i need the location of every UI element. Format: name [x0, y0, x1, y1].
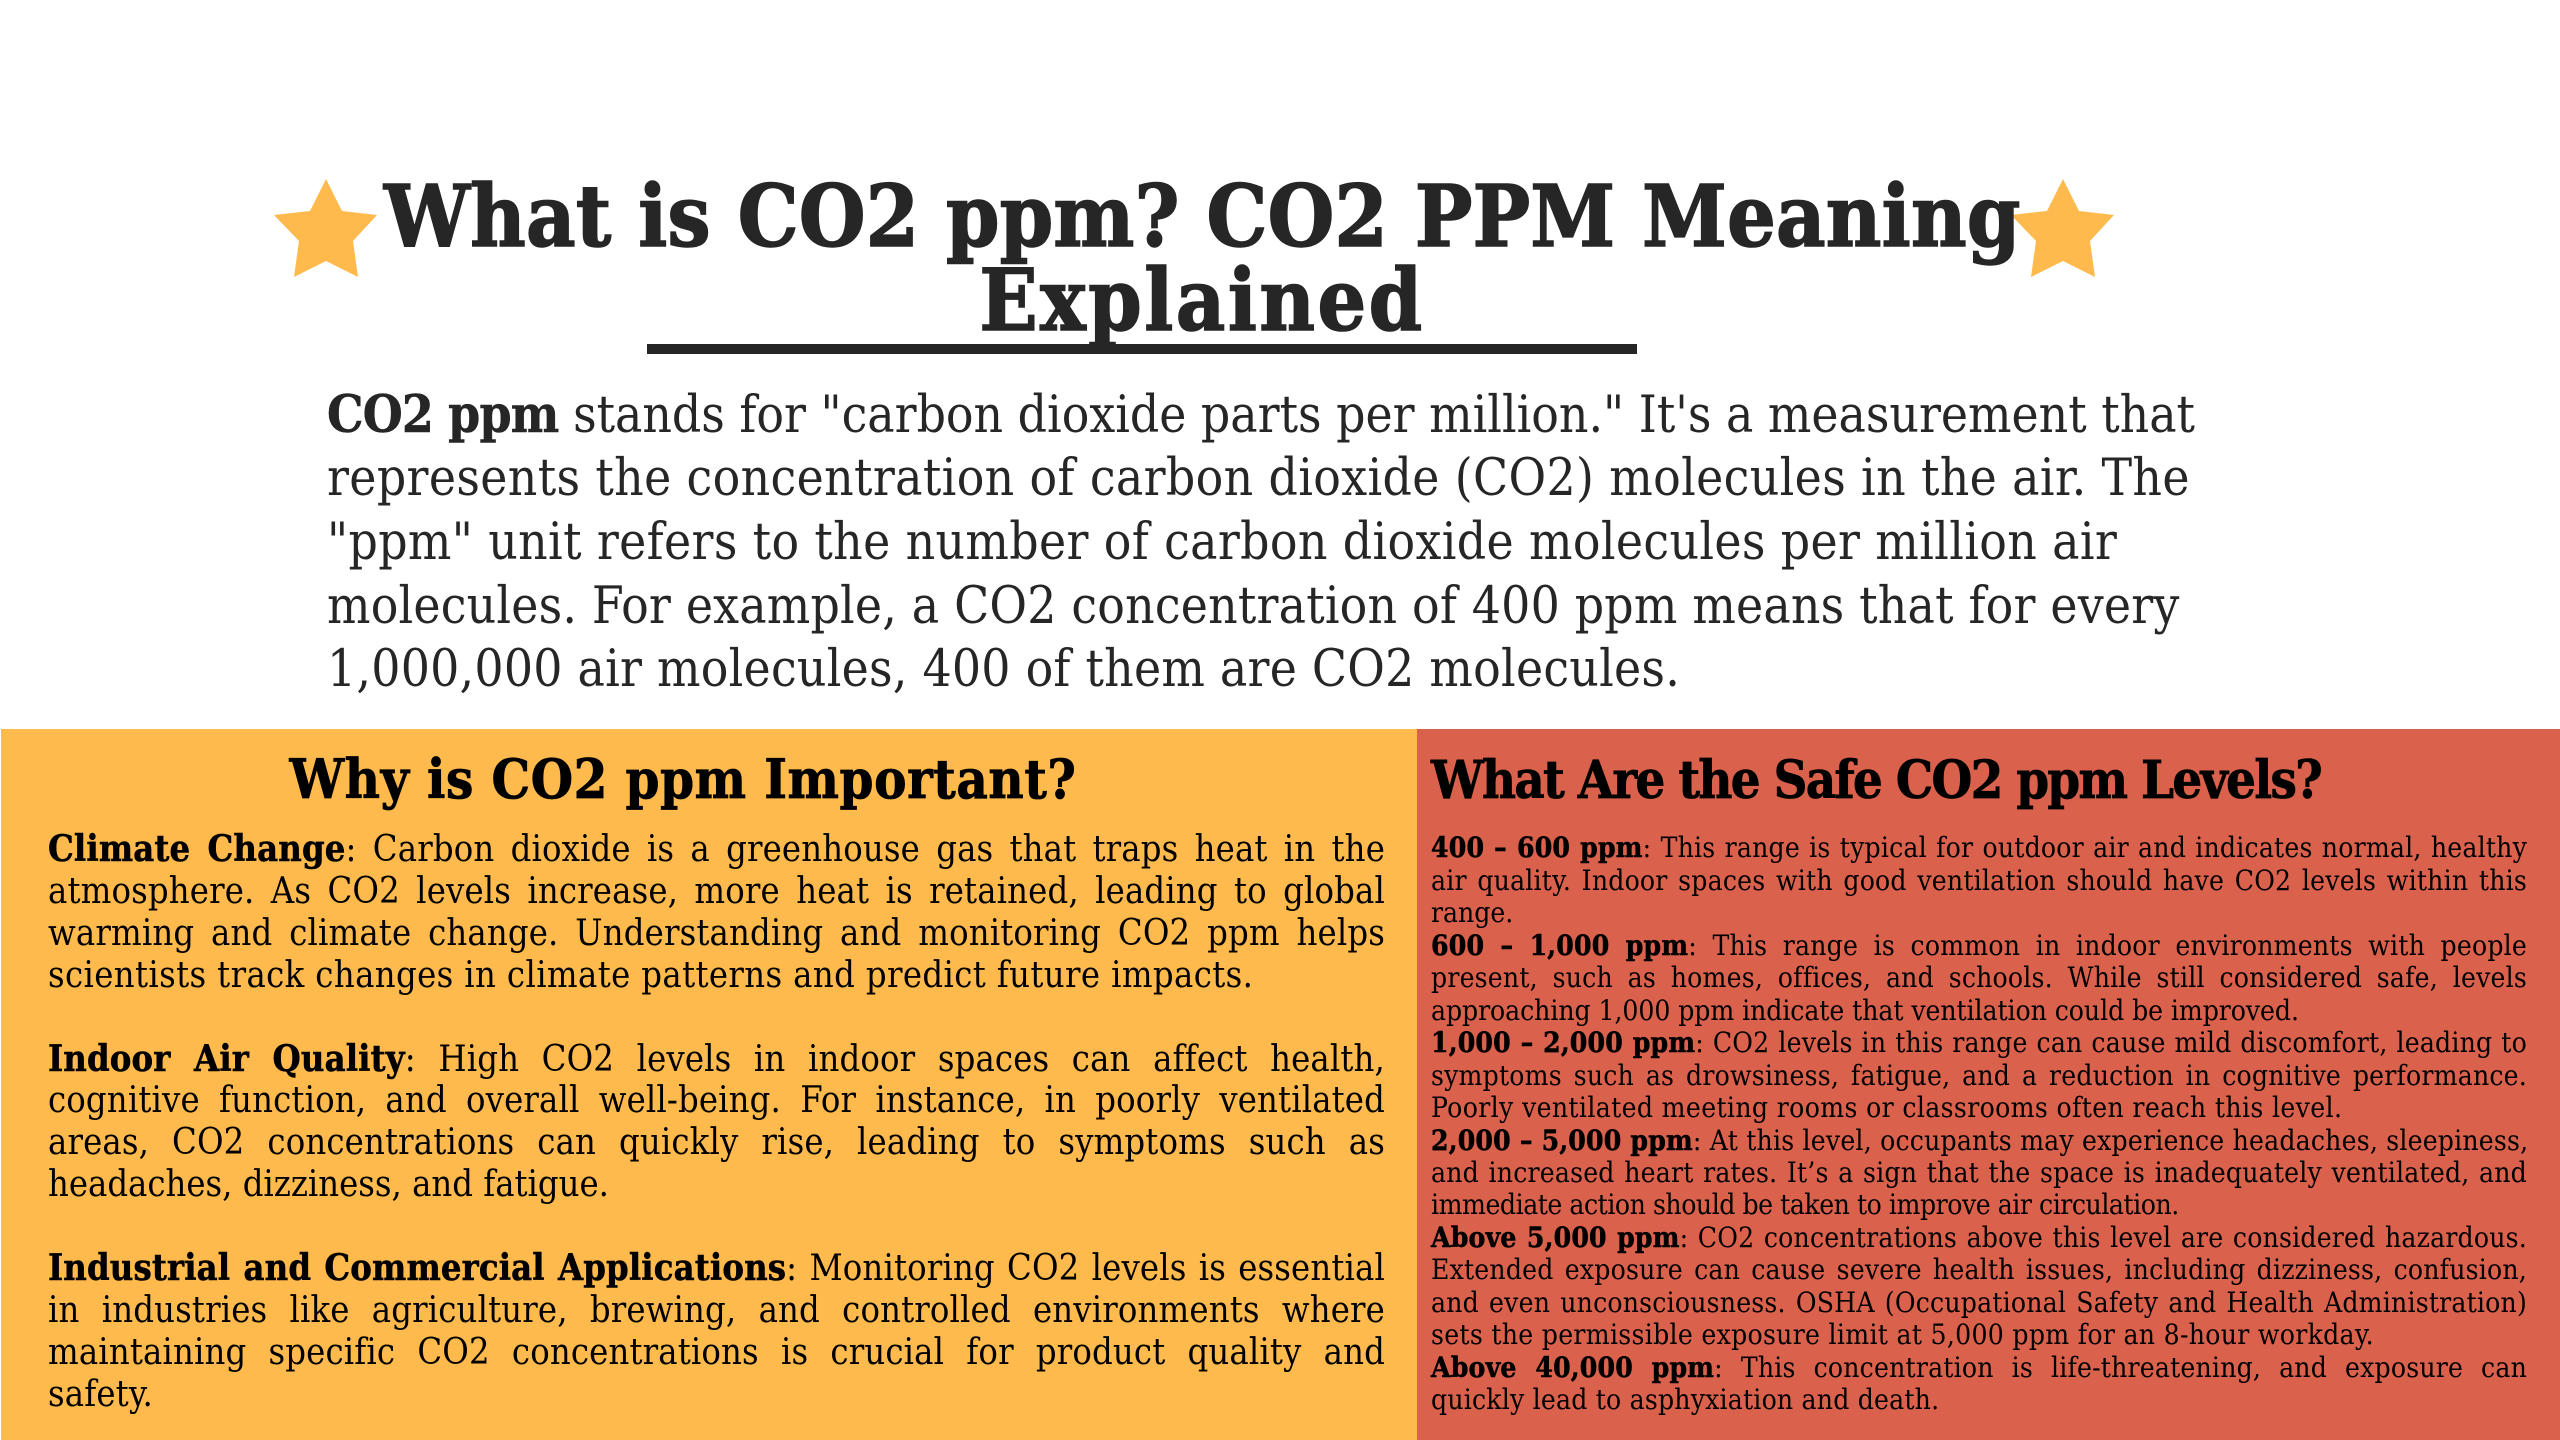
text block: safe levels list [1430, 831, 2528, 1416]
text block: safe levels list: air quality. Indoor spaces with good ventilation should have CO2 levels within this [1431, 864, 2527, 897]
text block: safe levels list: sets the permissible exposure limit at 5,000 ppm for an 8-hour workday. [1431, 1318, 2374, 1351]
text block: indoor air quality: headaches, dizziness, and fatigue. [48, 1164, 609, 1205]
text block: industrial applications: Industrial and Commercial Applications: Monitoring CO2 levels is essential [48, 1247, 1385, 1289]
text block: climate change [48, 828, 1385, 996]
heading: why important: Why is CO2 ppm Important? [290, 747, 1076, 811]
text block: climate change: atmosphere. As CO2 levels increase, more heat is retained, leading to global [48, 871, 1385, 912]
text block: safe levels list: Extended exposure can cause severe health issues, including dizziness, confusion, [1431, 1253, 2527, 1286]
text block: industrial applications [48, 1247, 1385, 1415]
text block: safe levels list: immediate action should be taken to improve air circulation. [1431, 1188, 2179, 1221]
icon: right star [2014, 179, 2114, 277]
title: What is CO2 ppm? CO2 PPM Meaning [384, 167, 2021, 267]
text block: safe levels list: 400 – 600 ppm: This range is typical for outdoor air and indicates normal, healthy [1431, 831, 2527, 864]
text block: safe levels list: quickly lead to asphyxiation and death. [1431, 1383, 1939, 1416]
heading: safe levels: What Are the Safe CO2 ppm Levels? [1431, 750, 2321, 810]
text block: industrial applications: maintaining specific CO2 concentrations is crucial for product quality and [48, 1332, 1385, 1373]
text block: safe levels list: Poorly ventilated meeting rooms or classrooms often reach this level. [1431, 1091, 2342, 1124]
intro text: "ppm" unit refers to the number of carbon dioxide molecules per million air [327, 513, 2117, 572]
text block: safe levels list: 1,000 – 2,000 ppm: CO2 levels in this range can cause mild discomfort, leading to [1431, 1026, 2527, 1059]
title underline [647, 344, 1637, 354]
text block: safe levels list: approaching 1,000 ppm indicate that ventilation could be improved. [1431, 994, 2299, 1027]
panel: why important [1, 729, 1417, 1440]
text block: safe levels list: 600 – 1,000 ppm: This range is common in indoor environments with people [1431, 929, 2527, 962]
intro text [327, 384, 2195, 699]
text block: industrial applications: in industries like agriculture, brewing, and controlled environments where [48, 1290, 1385, 1331]
text block: safe levels list: and even unconsciousness. OSHA (Occupational Safety and Health Administration) [1431, 1286, 2527, 1319]
panel: safe levels [1417, 729, 2560, 1440]
text block: safe levels list: range. [1431, 896, 1513, 929]
text block: industrial applications: safety. [48, 1374, 153, 1415]
text block: indoor air quality: areas, CO2 concentrations can quickly rise, leading to symptoms such as [48, 1122, 1385, 1163]
text block: safe levels list: symptoms such as drowsiness, fatigue, and a reduction in cognitive performance. [1431, 1059, 2527, 1092]
text block: safe levels list: present, such as homes, offices, and schools. While still considered safe, levels [1431, 961, 2527, 994]
intro text: CO2 ppm stands for "carbon dioxide parts per million." It's a measurement that [327, 384, 2195, 444]
text block: indoor air quality: cognitive function, and overall well-being. For instance, in poorly ventilated [48, 1080, 1385, 1121]
intro text: represents the concentration of carbon dioxide (CO2) molecules in the air. The [327, 449, 2190, 508]
title [382, 167, 2021, 351]
text block: climate change: warming and climate change. Understanding and monitoring CO2 ppm helps [48, 913, 1385, 954]
text block: climate change: Climate Change: Carbon dioxide is a greenhouse gas that traps heat in the [48, 828, 1385, 870]
intro text: molecules. For example, a CO2 concentration of 400 ppm means that for every [327, 577, 2179, 636]
text block: safe levels list: and increased heart rates. It’s a sign that the space is inadequately ventilated, and [1431, 1156, 2527, 1189]
text block: indoor air quality: Indoor Air Quality: High CO2 levels in indoor spaces can affect health, [48, 1038, 1385, 1080]
text block: safe levels list: 2,000 – 5,000 ppm: At this level, occupants may experience headaches, sleepiness, [1431, 1124, 2528, 1157]
text block: safe levels list: Above 40,000 ppm: This concentration is life-threatening, and exposure can [1431, 1351, 2527, 1384]
icon: left star [274, 179, 377, 277]
text block: climate change: scientists track changes in climate patterns and predict future impacts. [48, 955, 1253, 996]
intro text: 1,000,000 air molecules, 400 of them are CO2 molecules. [327, 640, 1680, 699]
text block: indoor air quality [48, 1038, 1385, 1205]
title: Explained [979, 251, 1425, 351]
text block: safe levels list: Above 5,000 ppm: CO2 concentrations above this level are considered hazardous. [1431, 1221, 2527, 1254]
